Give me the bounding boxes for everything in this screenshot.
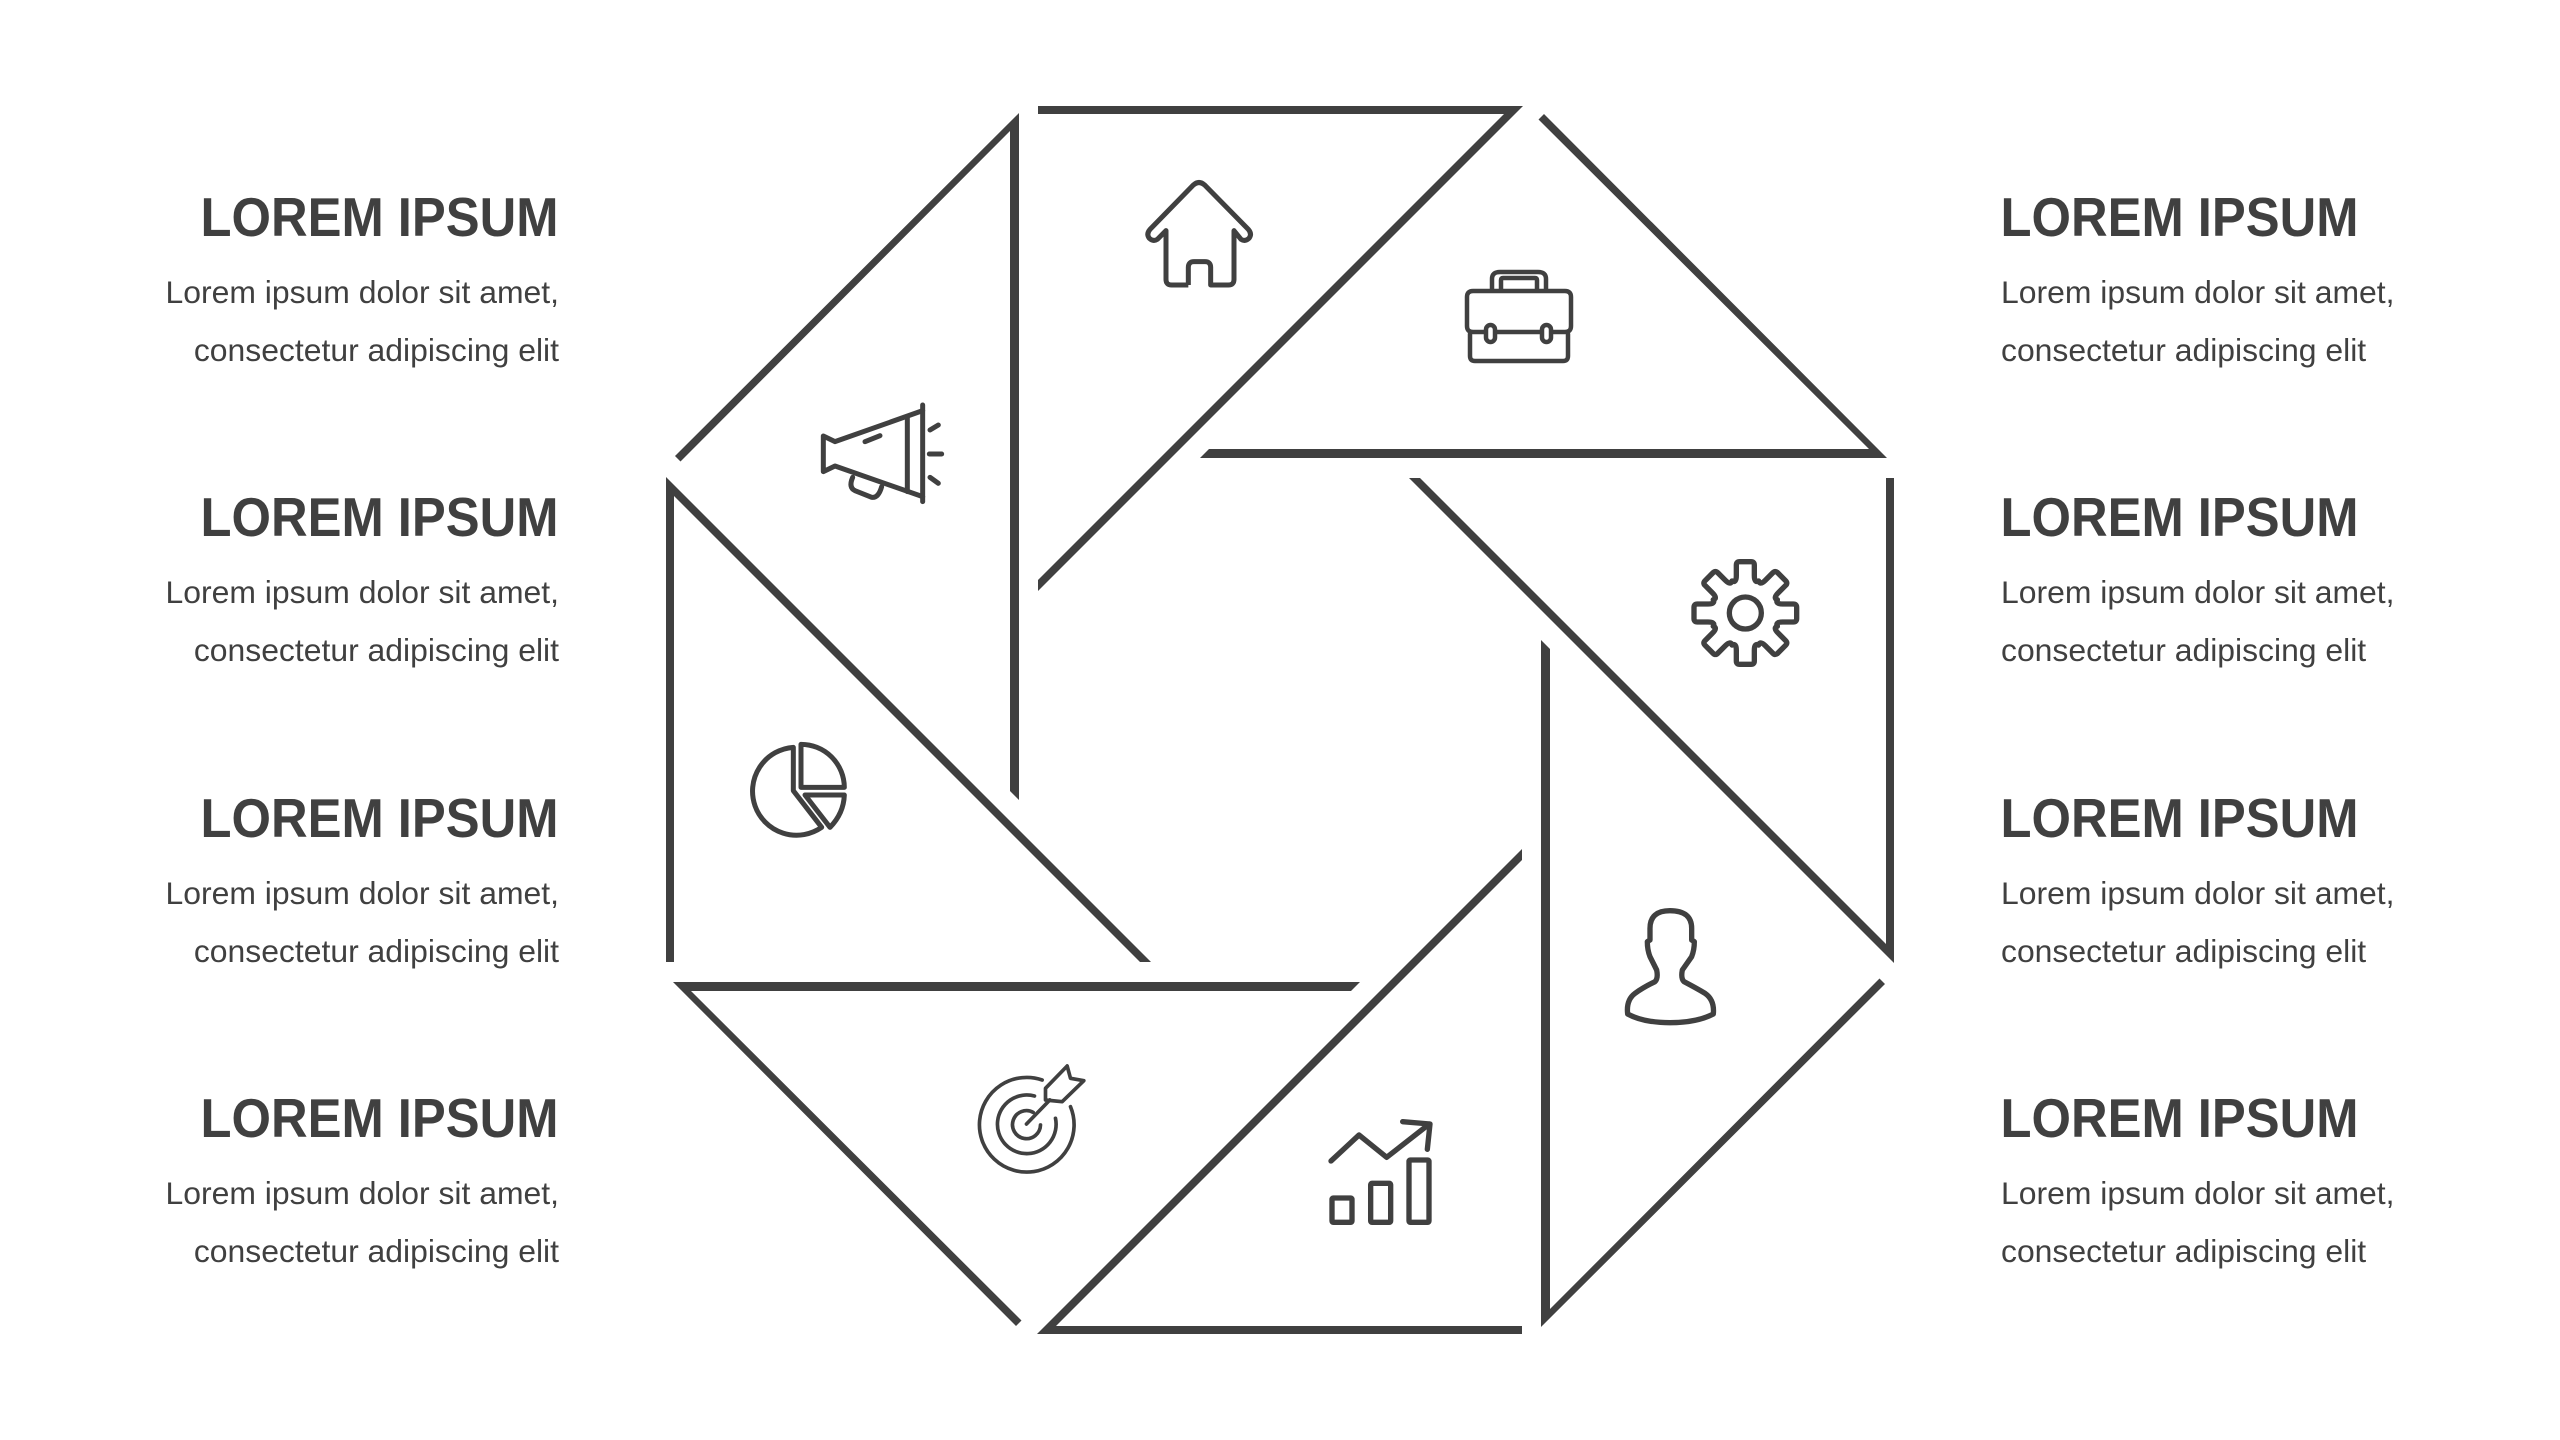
body line 2: consectetur adipiscing elit [2001,632,2366,668]
heading: LOREM IPSUM [200,486,558,548]
body line 1: Lorem ipsum dolor sit amet, [166,274,559,310]
panel: target segment [673,982,1360,1326]
text block: right 1 [2000,186,2394,368]
body line 1: Lorem ipsum dolor sit amet, [166,574,559,610]
icon: briefcase [1467,272,1571,361]
body line 2: consectetur adipiscing elit [194,933,559,969]
body line 1: Lorem ipsum dolor sit amet, [2001,574,2394,610]
panel: person segment [1541,640,1885,1327]
body line 1: Lorem ipsum dolor sit amet, [2001,1175,2394,1211]
body line 2: consectetur adipiscing elit [194,632,559,668]
segment outline: gear [1409,478,1894,963]
segment outline: house [1038,106,1523,591]
segment outline: briefcase [1200,114,1887,458]
text block: right 3 [2000,787,2394,969]
segment outline: pie chart [666,477,1151,962]
body line 1: Lorem ipsum dolor sit amet, [166,1175,559,1211]
heading: LOREM IPSUM [2000,1087,2358,1149]
icon: megaphone [823,405,942,502]
panel: briefcase segment [1200,114,1887,458]
segment outline: megaphone [675,113,1019,800]
panel: megaphone segment [675,113,1019,800]
heading: LOREM IPSUM [200,1087,558,1149]
heading: LOREM IPSUM [2000,186,2358,248]
text block: right 4 [2000,1087,2394,1269]
icon: house [1148,182,1251,285]
text block: left 4 [166,1087,559,1269]
heading: LOREM IPSUM [2000,486,2358,548]
text block: left 3 [166,787,559,969]
icon: person [1627,911,1713,1023]
body line 1: Lorem ipsum dolor sit amet, [2001,875,2394,911]
panel: pie chart segment [666,477,1151,962]
text block: left 1 [166,186,559,368]
heading: LOREM IPSUM [200,787,558,849]
body line 2: consectetur adipiscing elit [194,332,559,368]
body line 2: consectetur adipiscing elit [2001,332,2366,368]
text block: right 2 [2000,486,2394,668]
body line 2: consectetur adipiscing elit [2001,1233,2366,1269]
panel: house segment [1038,106,1523,591]
body line 1: Lorem ipsum dolor sit amet, [166,875,559,911]
heading: LOREM IPSUM [200,186,558,248]
body line 2: consectetur adipiscing elit [194,1233,559,1269]
icon: target with dart [979,1066,1084,1172]
segment outline: target [673,982,1360,1326]
segment outline: chart [1037,849,1522,1334]
segment outline: person [1541,640,1885,1327]
panel: gear segment [1409,478,1894,963]
text block: left 2 [166,486,559,668]
panel: chart segment [1037,849,1522,1334]
heading: LOREM IPSUM [2000,787,2358,849]
icon: gear [1694,562,1797,664]
body line 2: consectetur adipiscing elit [2001,933,2366,969]
body line 1: Lorem ipsum dolor sit amet, [2001,274,2394,310]
icon: growth chart [1331,1122,1430,1222]
icon: pie chart [753,744,844,835]
